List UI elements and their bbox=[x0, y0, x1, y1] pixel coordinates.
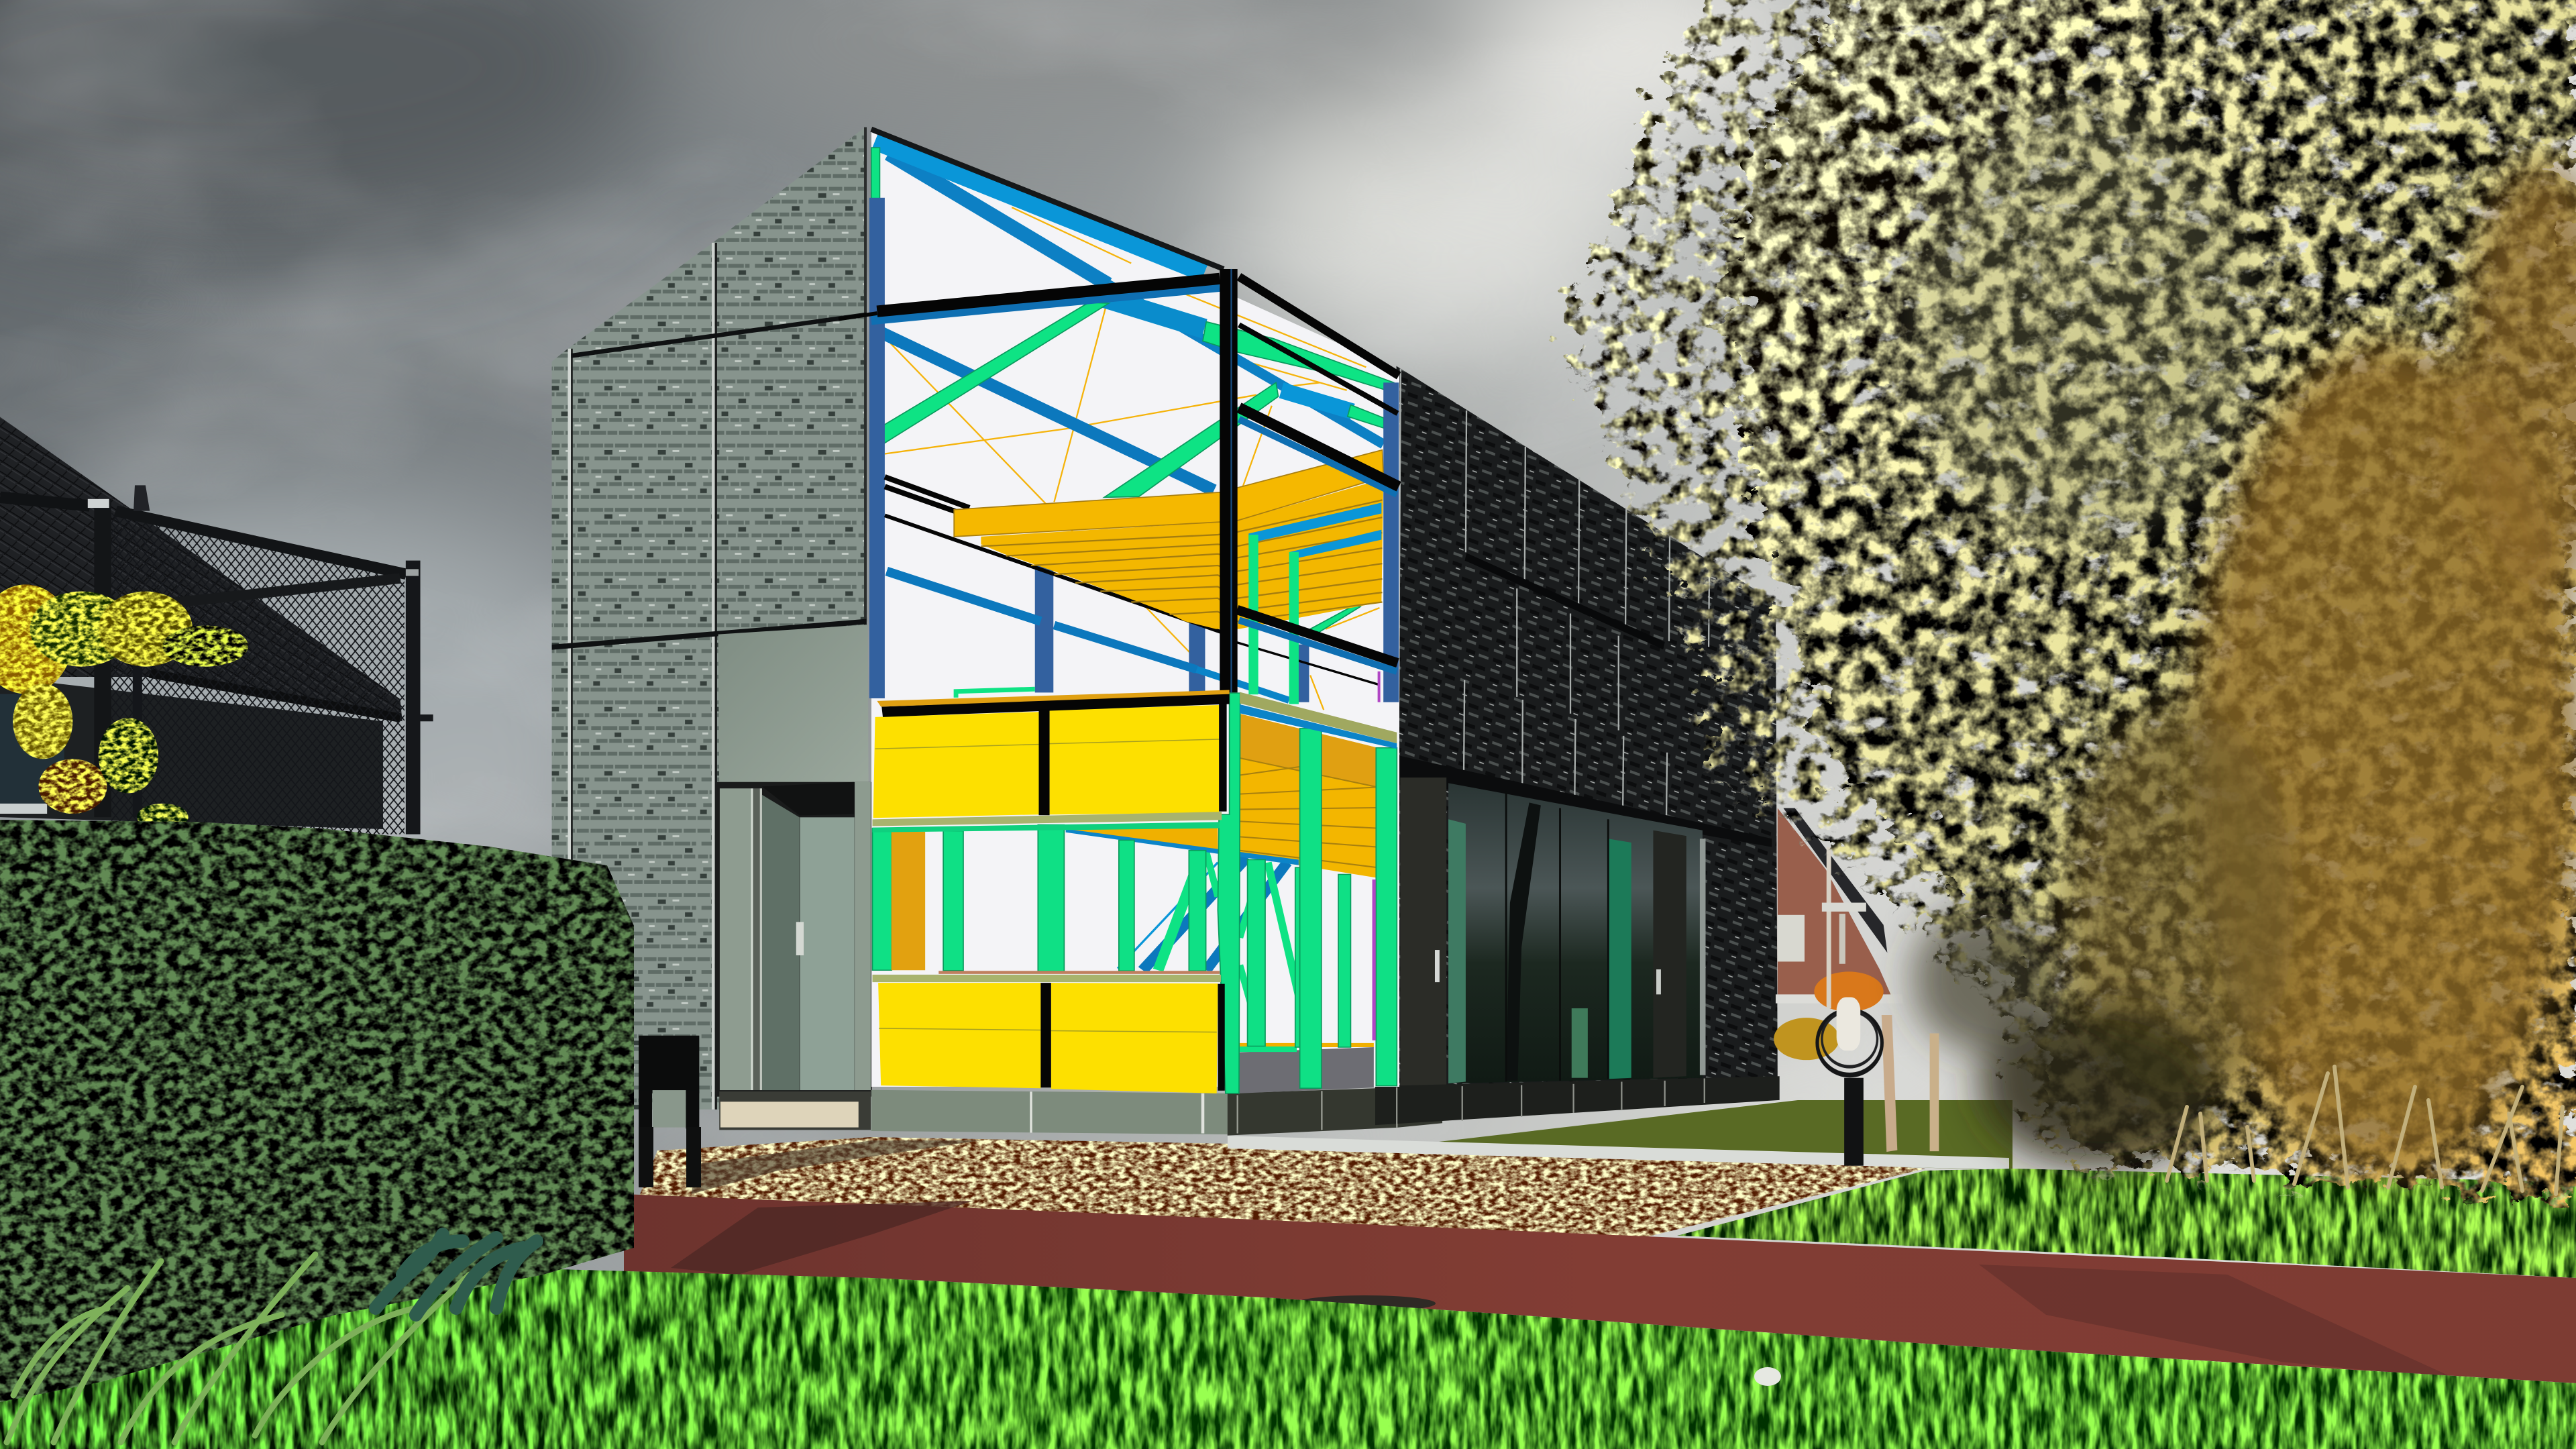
structural model: lower frame with yellow wall panels bbox=[873, 690, 1397, 1093]
building left gable facade bbox=[552, 127, 869, 1110]
EV charger with cable ring and tree stakes bbox=[1817, 998, 1939, 1166]
upper and lower blue rafters bbox=[875, 141, 1383, 490]
black frame on panels bbox=[881, 693, 1230, 1091]
plinth under building bbox=[871, 1085, 1442, 1136]
chain-link fence bbox=[0, 485, 433, 835]
entrance lintel panel bbox=[718, 625, 869, 786]
mailbox bbox=[639, 1036, 699, 1128]
long grass tufts in foreground bbox=[7, 1234, 537, 1442]
pale reeds at foot of tree bbox=[2167, 1067, 2563, 1194]
thin orange bracing bbox=[885, 207, 1379, 667]
building right long facade with perforated cladding bbox=[1397, 366, 1778, 1089]
yellow autumn shrub by fence bbox=[0, 584, 248, 830]
olive edge strips bbox=[873, 812, 1222, 826]
blue columns bbox=[869, 198, 1399, 702]
mailbox legs bbox=[639, 1127, 701, 1187]
underside of timber deck bbox=[1066, 823, 1218, 852]
structural model: white background bbox=[871, 132, 1399, 1087]
lawn, gravel, curb, cycle path and grass bbox=[0, 1100, 2576, 1449]
green columns bbox=[873, 693, 1397, 1093]
structural model: upper frame bbox=[839, 129, 1399, 710]
hedge bbox=[0, 820, 634, 1402]
grey floor behind bbox=[1239, 1047, 1374, 1093]
plinth continuation along long facade bbox=[1375, 1076, 1780, 1125]
blue beams with green posts in deck bbox=[1248, 502, 1381, 541]
left lower black and blue beams bbox=[885, 477, 1379, 700]
neighbouring house with dark roof bbox=[0, 417, 402, 829]
willow tree bbox=[1569, 0, 2576, 1199]
distant green and blue diagonal bracing bbox=[1118, 852, 1299, 1044]
green diagonal braces bbox=[871, 148, 1394, 633]
glass curtain wall bbox=[1448, 783, 1703, 1083]
black frame members bbox=[839, 129, 1399, 672]
distant red brick house bbox=[1774, 808, 1902, 1060]
yellow insulation wall panels bbox=[873, 705, 1219, 1093]
yellow timber deck with joists bbox=[981, 479, 1383, 629]
entrance door recess bbox=[716, 782, 872, 1130]
dark service doors bbox=[1400, 777, 1446, 1086]
